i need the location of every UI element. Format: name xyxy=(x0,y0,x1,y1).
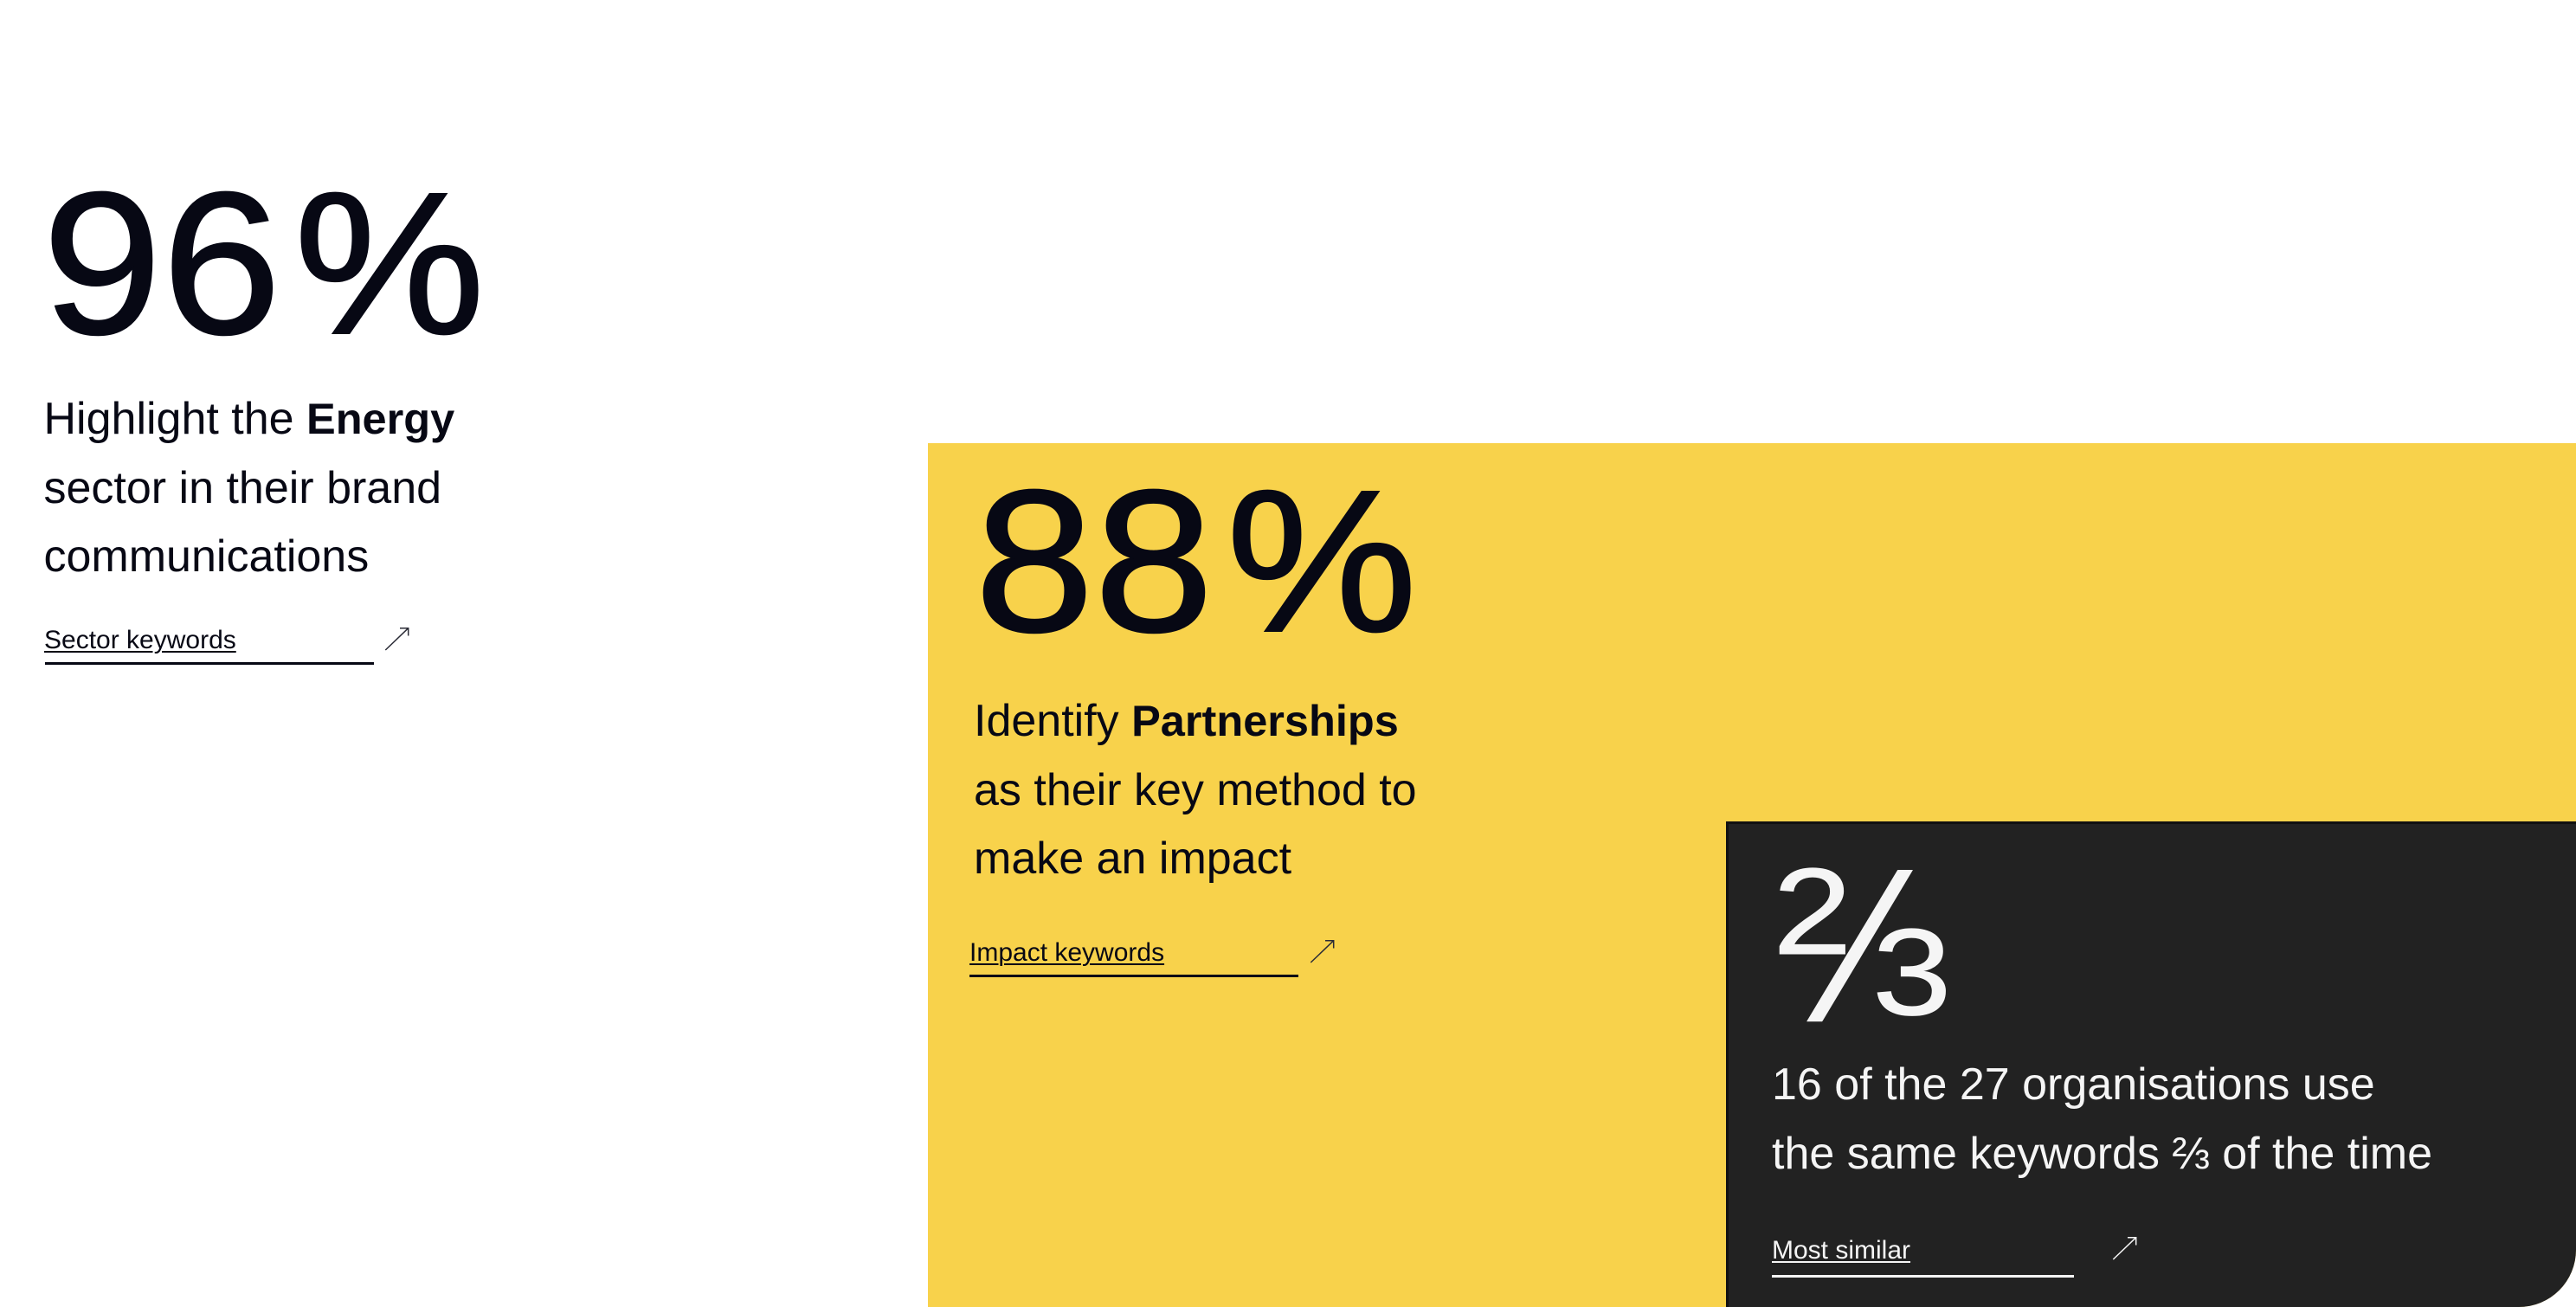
text: partnerships description xyxy=(974,696,1417,884)
icon: arrow xyxy=(384,628,409,651)
link: most similar: Most similar xyxy=(1772,1236,1910,1265)
link underline xyxy=(969,975,1298,977)
stat: 88%: 88% xyxy=(975,447,1417,674)
text: partnerships description: as their key method to xyxy=(974,765,1417,815)
panel: yellow partnerships xyxy=(928,443,2576,1307)
link underline xyxy=(1772,1274,2074,1278)
stat: 96%: 96% xyxy=(42,150,485,377)
panel: energy sector stat xyxy=(42,150,485,665)
text: energy description: Highlight the Energy xyxy=(43,394,454,444)
icon: arrow xyxy=(1311,940,1335,963)
stat: two thirds xyxy=(1773,822,1952,1068)
stat: two thirds: 3 xyxy=(1872,904,1952,1041)
stat: two thirds: 2 xyxy=(1773,843,1852,981)
text: partnerships description: Identify Partnerships xyxy=(974,696,1399,746)
text: partnerships description: make an impact xyxy=(974,834,1291,884)
text: similarity description: the same keywords ⅔ of the time xyxy=(1772,1129,2432,1179)
stat: two thirds: ⁄ xyxy=(1850,822,1885,1068)
icon: arrow xyxy=(2112,1237,2136,1260)
link: impact keywords: Impact keywords xyxy=(969,938,1164,967)
panel: dark similarity xyxy=(1726,821,2576,1307)
text: similarity description xyxy=(1772,1059,2432,1179)
text: energy description: communications xyxy=(43,531,369,582)
link: sector keywords: Sector keywords xyxy=(44,626,236,654)
link underline xyxy=(45,662,374,665)
text: similarity description: 16 of the 27 organisations use xyxy=(1772,1059,2375,1110)
text: energy description xyxy=(43,394,454,582)
text: energy description: sector in their brand xyxy=(43,462,441,512)
